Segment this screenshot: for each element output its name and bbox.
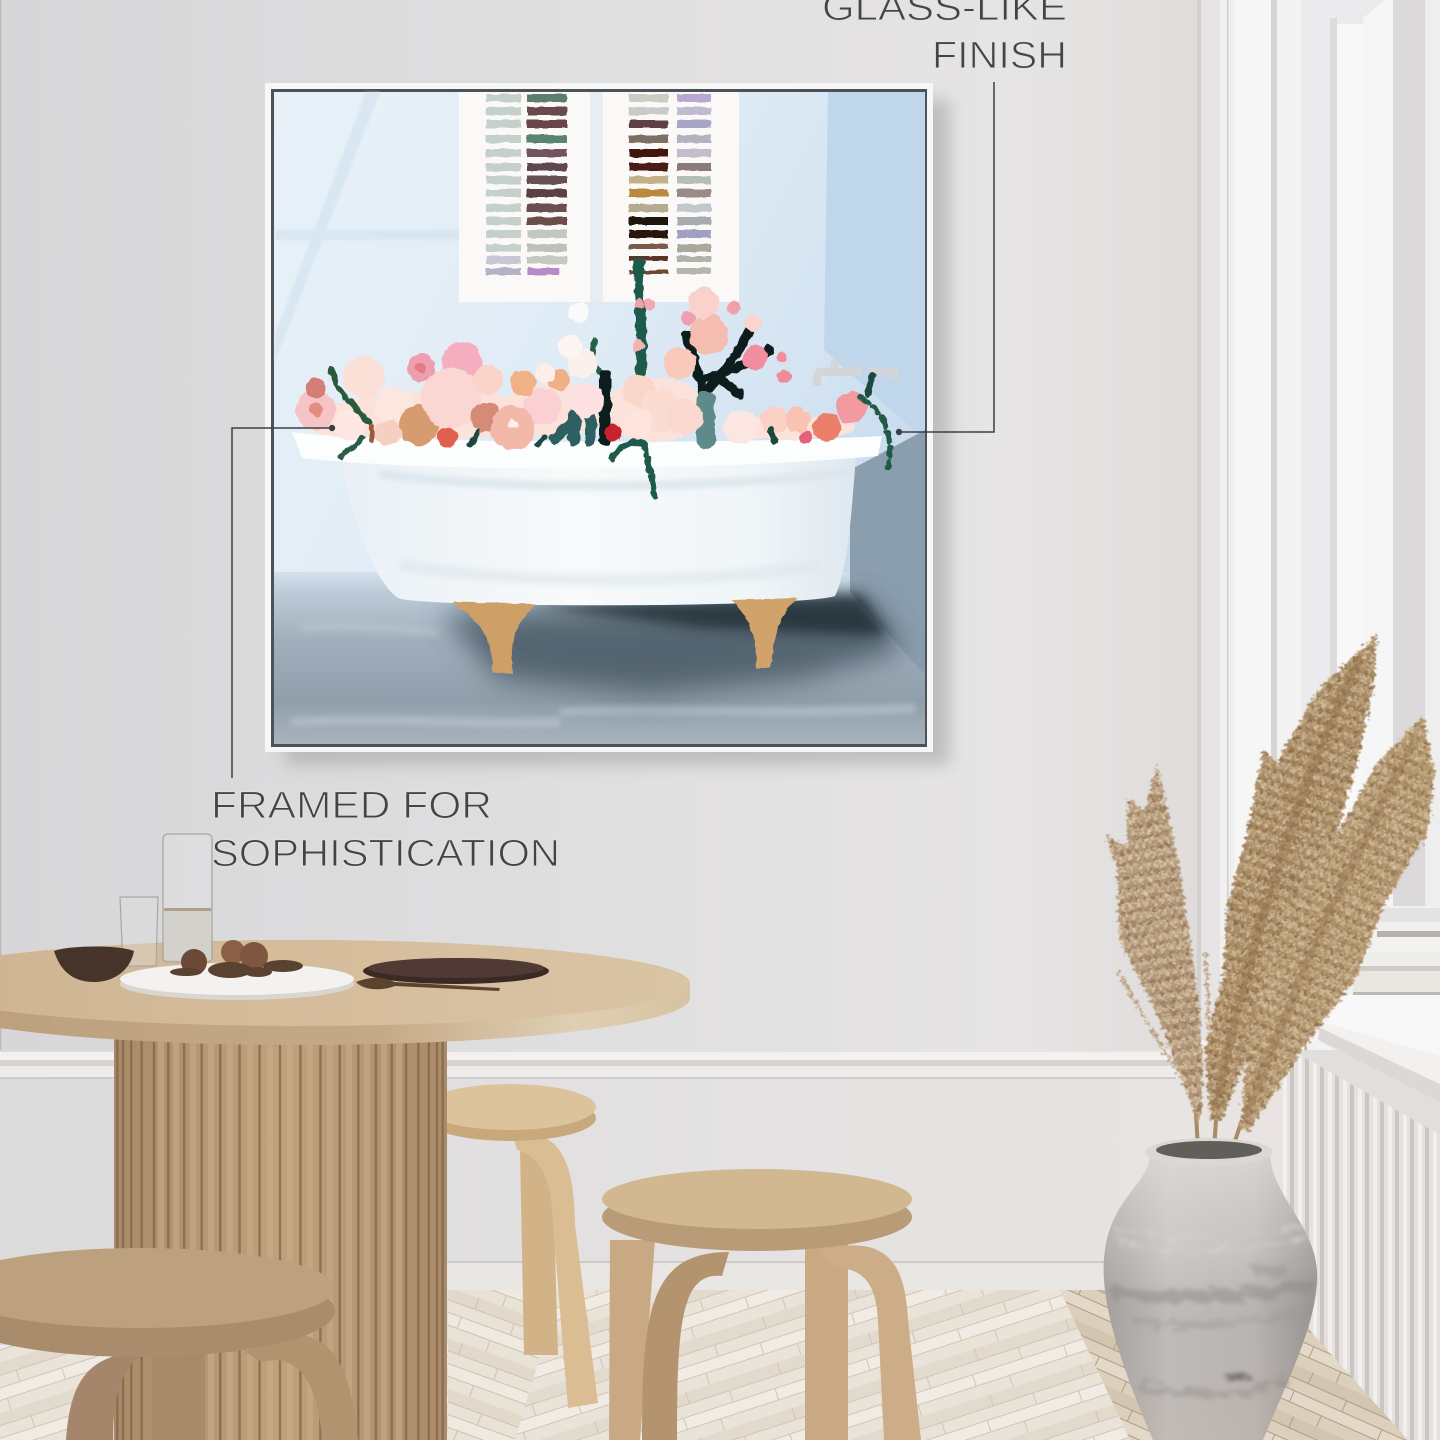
painting: shutter panels bbox=[459, 92, 739, 302]
callout: glass-like finish bbox=[822, 0, 1067, 435]
background: wainscot and moulding bbox=[0, 1050, 1290, 1350]
painting: faucet bbox=[817, 360, 894, 386]
dark bowl bbox=[54, 946, 134, 982]
callout text: FINISH bbox=[932, 35, 1067, 77]
tall glass carafe bbox=[163, 834, 212, 962]
plume: left bbox=[1105, 765, 1208, 1125]
painting: blue side wall bbox=[824, 92, 925, 440]
pampas grass bbox=[1105, 634, 1435, 1150]
books on sill bbox=[1353, 931, 1440, 995]
artwork: painting bbox=[274, 92, 925, 744]
pale bloom mass bbox=[305, 378, 855, 442]
callout text bbox=[822, 0, 1067, 77]
callout text: FRAMED FOR bbox=[211, 785, 492, 827]
spoon bbox=[356, 978, 500, 991]
painting: window light bbox=[275, 92, 465, 362]
painting: right shadow wall bbox=[850, 430, 925, 675]
dark plate bbox=[363, 958, 549, 984]
tableware bbox=[54, 834, 549, 1000]
ceramic vase bbox=[1104, 1138, 1317, 1440]
marble board bbox=[120, 963, 354, 1000]
painting: floor brush streaks bbox=[290, 626, 915, 723]
callout dot bbox=[896, 429, 902, 435]
back stool bbox=[424, 1084, 598, 1408]
callout leader line bbox=[900, 82, 994, 432]
window sill bbox=[1312, 995, 1440, 1102]
plume: centre bbox=[1205, 634, 1377, 1120]
callout leader line bbox=[232, 428, 332, 778]
painting: flowers bbox=[296, 262, 890, 497]
vase texture bbox=[1108, 1226, 1312, 1394]
small glass bbox=[120, 897, 158, 966]
foliage in front of blooms bbox=[331, 370, 890, 497]
painting: shutter slats bbox=[486, 94, 711, 275]
foliage behind blooms bbox=[555, 262, 770, 440]
round table top bbox=[0, 940, 690, 1045]
artwork frame and shadow bbox=[265, 83, 950, 765]
painting: bathtub bbox=[292, 432, 882, 605]
vase rim bbox=[1145, 1138, 1273, 1166]
plume: right bbox=[1240, 716, 1435, 1130]
painting: gold feet bbox=[452, 598, 797, 674]
painting: tub floor shadow bbox=[440, 600, 905, 695]
front right stool bbox=[602, 1169, 921, 1440]
callout text bbox=[211, 785, 560, 875]
floor bbox=[0, 1290, 1410, 1440]
stems bbox=[1195, 1090, 1242, 1150]
callout dot bbox=[329, 425, 335, 431]
nuts bbox=[170, 940, 303, 978]
window frame bbox=[1197, 0, 1440, 1050]
table pedestal bbox=[114, 1030, 447, 1440]
callout text: SOPHISTICATION bbox=[211, 833, 560, 875]
radiator bbox=[1283, 1045, 1440, 1440]
background: wall bbox=[0, 0, 1200, 1060]
front left stool bbox=[0, 1248, 358, 1440]
painting: floor bbox=[274, 572, 925, 744]
painting: wall bbox=[274, 92, 925, 744]
blooms bbox=[296, 390, 336, 430]
callout: framed for sophistication bbox=[211, 425, 560, 875]
